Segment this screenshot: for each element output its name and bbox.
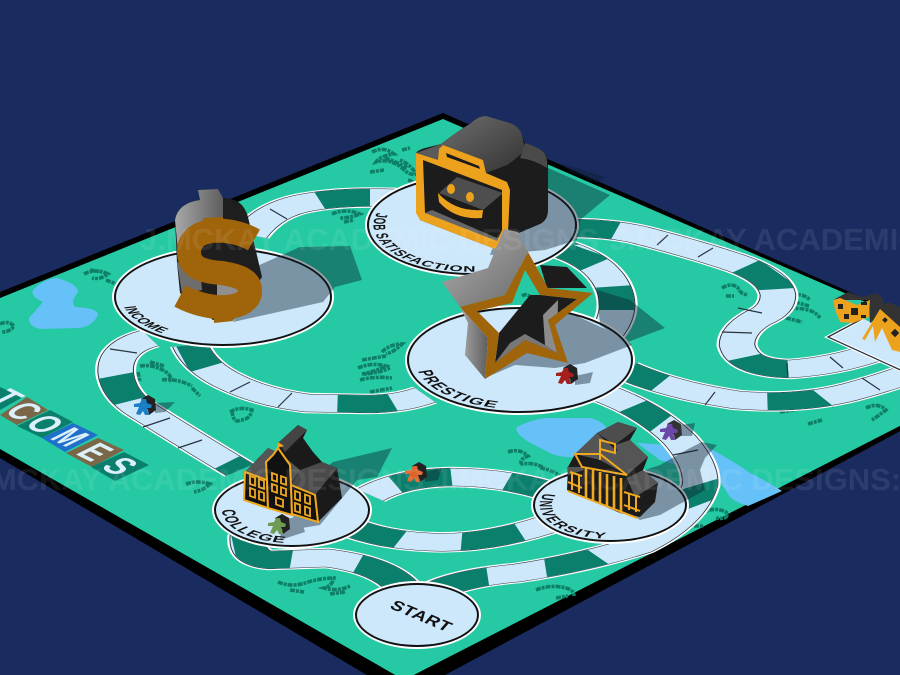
meeple: red <box>556 364 578 384</box>
watermark: J.MCKAY ACADEMIC DESIGNS: <box>432 462 900 497</box>
space: income <box>112 246 334 348</box>
label: start: START <box>386 597 456 635</box>
icon: university building <box>567 422 658 518</box>
cast shadows <box>155 163 717 540</box>
icon: star <box>442 229 593 379</box>
title tiles: outcomes <box>0 385 149 481</box>
space: prestige <box>405 305 635 415</box>
space: university <box>531 466 689 544</box>
label: prestige: PRESTIGE <box>418 370 498 408</box>
meeple: purple <box>660 420 682 440</box>
meeple: green <box>268 514 290 534</box>
space: start <box>353 581 481 649</box>
label: college: COLLEGE <box>222 510 286 543</box>
lakes <box>29 278 782 506</box>
label: university: UNIVERSITY <box>540 494 606 538</box>
meeple: orange <box>405 462 427 482</box>
icon: smiling briefcase <box>416 116 548 249</box>
tree patches <box>0 148 886 598</box>
title tiles: outcomes: M <box>41 422 99 451</box>
finish space <box>828 318 900 372</box>
title tiles: outcomes: E <box>66 439 122 466</box>
space: college <box>212 471 372 549</box>
icon: finish flags <box>833 292 900 352</box>
title tiles: outcomes: O <box>15 410 74 439</box>
watermark: J.MCKAY ACADEMIC DESIGNS <box>140 222 599 257</box>
icon: college building <box>244 425 342 522</box>
game path <box>110 198 900 592</box>
meeple: blue <box>134 395 156 415</box>
icon: dollar sign <box>175 189 262 323</box>
space: job satisfaction <box>365 173 579 277</box>
watermark <box>0 222 900 497</box>
title tiles: outcomes: S <box>91 453 147 480</box>
label: job satisfaction: JOB SATISFACTION <box>373 213 474 272</box>
label: income: INCOME <box>124 306 169 334</box>
